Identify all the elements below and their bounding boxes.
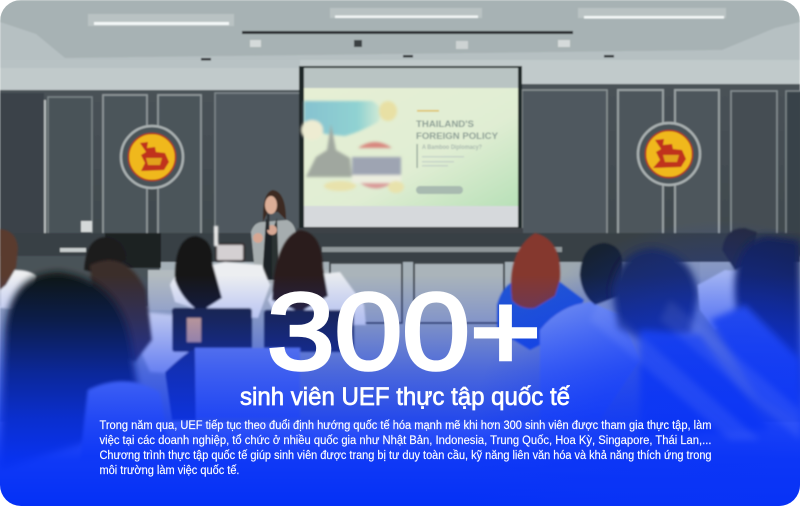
student behind laptop (84, 237, 126, 272)
wall panels right (522, 84, 800, 256)
emblem left (121, 126, 183, 188)
student with phone (170, 262, 270, 318)
description paragraph: Trong năm qua, UEF tiếp tục theo đuổi định hướng quốc tế hóa mạnh mẽ khi hơn 300 sinh viên được tham gia thực tập, làm (100, 418, 712, 432)
description paragraph: Chương trình thực tập quốc tế giúp sinh viên được trang bị tư duy toàn cầu, kỹ năng liên văn hóa và khả năng thích ứng trong (100, 448, 712, 462)
large foreground head (0, 272, 140, 470)
wall panels left (0, 90, 305, 258)
student in centre (268, 272, 366, 325)
track rail and spotlights (201, 31, 614, 60)
subtitle: sinh viên UEF thực tập quốc tế (240, 383, 570, 411)
slide title (416, 110, 499, 194)
ceiling lights (88, 8, 726, 26)
student foreground right (612, 248, 698, 345)
students far right (696, 269, 738, 328)
diagonal light streaks (590, 300, 800, 440)
description paragraph: việc tại các doanh nghiệp, tổ chức ở nhiều quốc gia như Nhật Bản, Indonesia, Trung Quốc, Hoa Kỳ, Singapore, Thái Lan,... (100, 433, 712, 447)
description paragraph (100, 418, 712, 477)
ceiling (0, 0, 800, 95)
student with headband (540, 302, 640, 420)
projector screen (297, 66, 523, 233)
description paragraph: môi trường làm việc quốc tế. (100, 463, 240, 477)
slide title: A Bamboo Diplomacy? (422, 145, 482, 151)
audience members (0, 226, 800, 470)
blue gradient overlay (0, 275, 800, 506)
shirt near foreground (141, 311, 190, 374)
slide title: THAILAND'S (416, 119, 474, 130)
chairs and table (172, 308, 252, 352)
big number: 300+ (267, 271, 541, 393)
emblem right (638, 123, 700, 185)
brown hair student (90, 260, 152, 362)
speaker (251, 190, 296, 283)
right side blue tint (516, 231, 800, 506)
student far left (0, 270, 36, 308)
slide title: FOREIGN POLICY (416, 131, 499, 142)
slide artwork (301, 101, 404, 193)
front wall and cabinet (0, 221, 800, 422)
student with red hair (497, 280, 584, 350)
